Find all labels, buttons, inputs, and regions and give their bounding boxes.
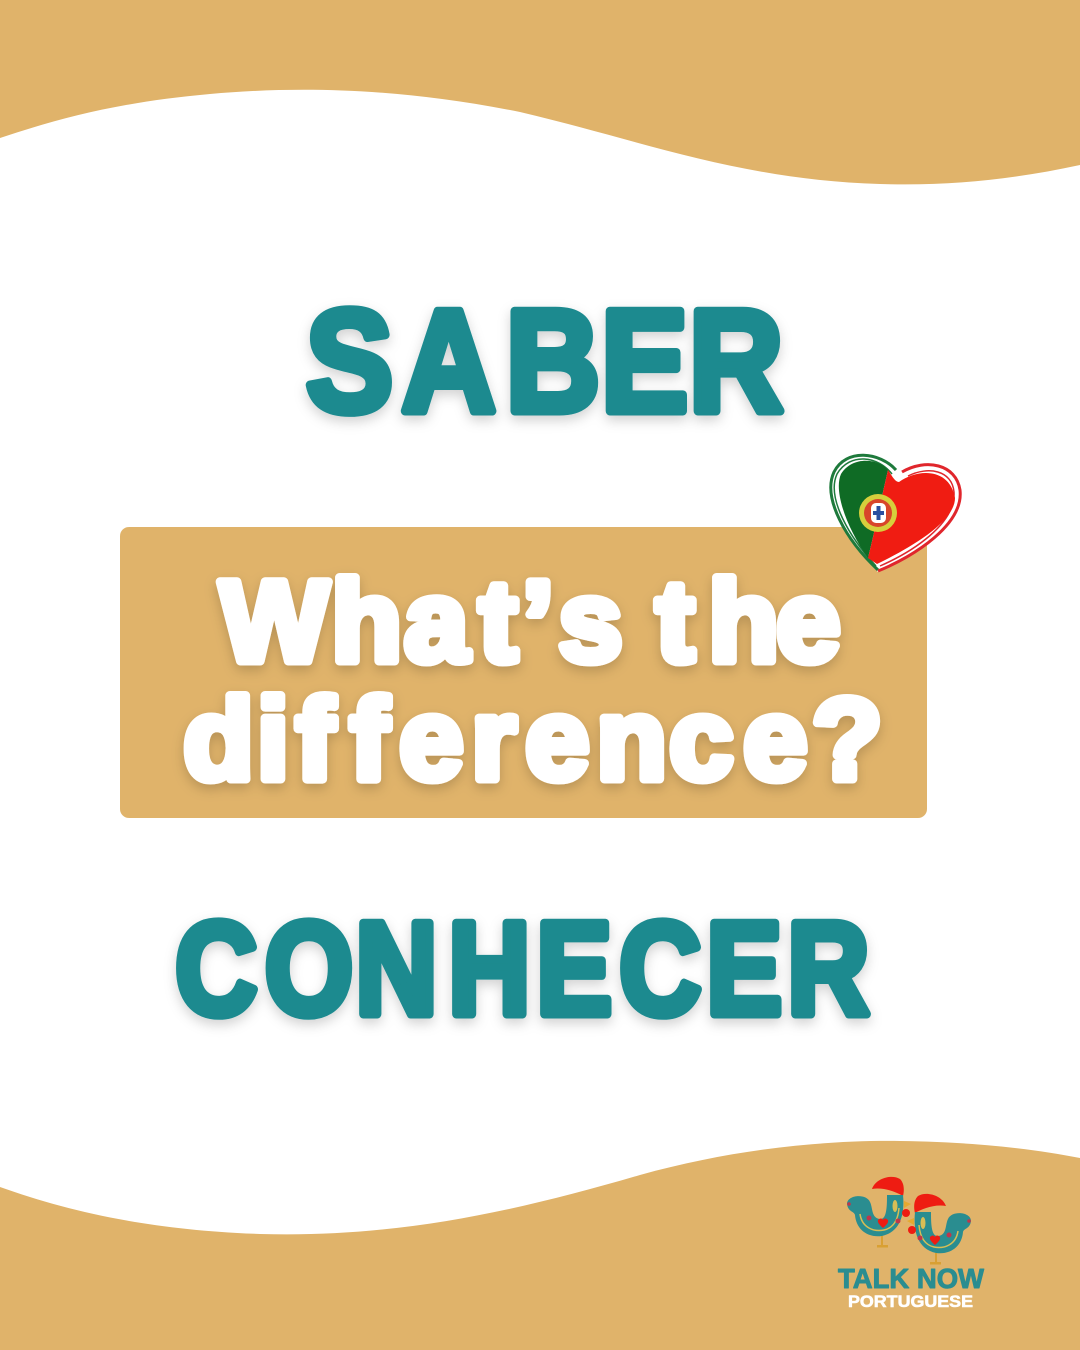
panel: question box — [120, 527, 927, 818]
text: difference?: difference? — [183, 676, 882, 804]
heading: SABER: SABER — [306, 281, 783, 443]
icon: right rooster — [907, 1194, 971, 1264]
text: TALK NOW: TALK NOW — [838, 1263, 985, 1294]
heading: CONHECER: CONHECER — [175, 896, 869, 1043]
icon: Portuguese flag heart — [830, 453, 962, 572]
flag coat of arms — [859, 494, 897, 532]
text: PORTUGUESE: PORTUGUESE — [848, 1292, 973, 1311]
logo: Talk Now Portuguese — [838, 1177, 985, 1311]
icon: left rooster — [847, 1177, 911, 1248]
text: What's the: What’s the — [220, 558, 840, 686]
bottom wave banner — [0, 1141, 1080, 1350]
top wave banner — [0, 0, 1080, 184]
